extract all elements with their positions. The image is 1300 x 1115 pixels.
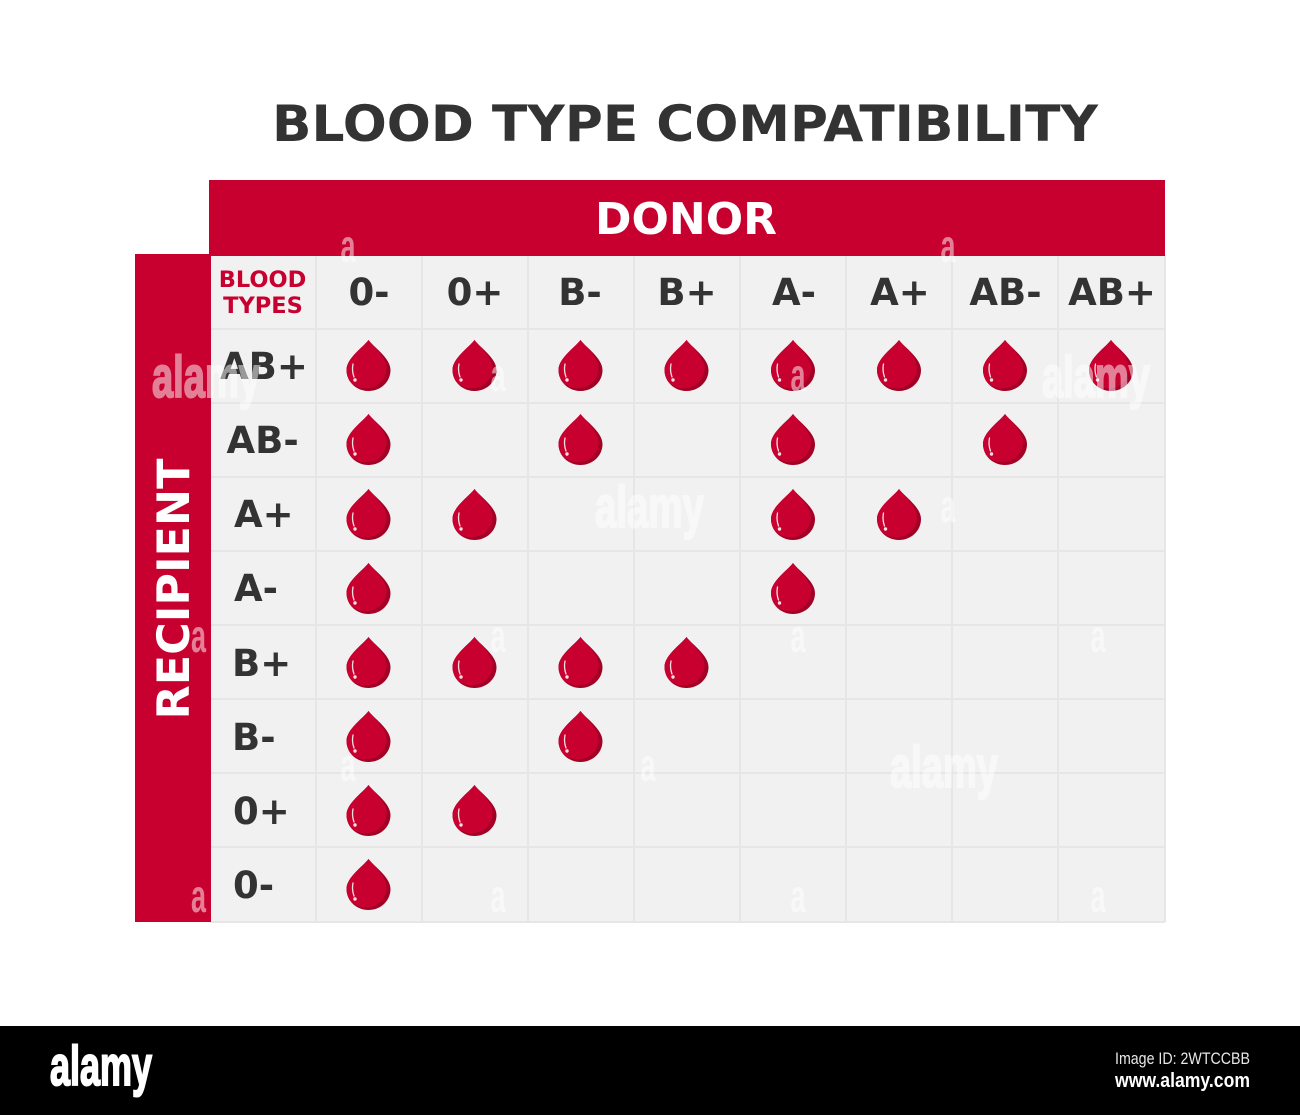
footer bar	[0, 1026, 1300, 1115]
watermarks: alamy	[1042, 345, 1150, 410]
watermarks: a	[490, 610, 506, 662]
watermarks: a	[940, 480, 956, 532]
recipient row headings: B+	[232, 642, 291, 685]
recipient row headings: AB+	[220, 345, 308, 388]
watermarks: a	[1090, 610, 1106, 662]
donor column headings: 0-	[348, 271, 390, 314]
watermarks: a	[191, 610, 206, 662]
donor column headings: A+	[870, 271, 930, 314]
donor header band: DONOR	[595, 194, 777, 245]
drops: B- recipient row	[346, 711, 602, 762]
donor column headings: B-	[558, 271, 602, 314]
donor header band	[209, 180, 1165, 256]
recipient row headings	[220, 345, 308, 907]
watermarks: alamy	[890, 735, 998, 800]
recipient row headings: 0+	[233, 790, 290, 833]
blood types corner label: TYPES	[223, 293, 303, 319]
donor column headings	[348, 271, 1156, 314]
drops: A- recipient row	[346, 563, 815, 614]
drops: AB+ recipient row	[346, 340, 1133, 391]
footer bar: alamy	[50, 1034, 152, 1097]
watermarks: a	[490, 870, 506, 922]
recipient row headings: A+	[234, 493, 294, 536]
drops: AB- recipient row	[346, 414, 1027, 465]
recipient row headings: B-	[232, 716, 276, 759]
footer bar: www.alamy.com	[1114, 1070, 1250, 1092]
blood types corner label	[219, 267, 306, 319]
footer bar: Image ID: 2WTCCBB	[1115, 1049, 1250, 1068]
donor column headings: 0+	[447, 271, 503, 314]
drops: B+ recipient row	[346, 637, 708, 688]
blood types corner label: BLOOD	[219, 267, 306, 293]
recipient side band	[135, 254, 211, 922]
panel: compatibility table background	[210, 255, 1165, 922]
drops: A+ recipient row	[346, 489, 921, 540]
watermarks: alamy	[595, 475, 704, 540]
drops: 0+ recipient row	[346, 785, 496, 836]
donor column headings: B+	[657, 271, 717, 314]
watermarks: a	[790, 870, 806, 922]
watermarks: a	[340, 220, 356, 272]
recipient side band: RECIPIENT	[149, 458, 200, 720]
watermarks: a	[490, 349, 506, 401]
donor column headings: AB+	[1068, 271, 1156, 314]
watermarks: a	[340, 739, 356, 791]
watermarks: alamy	[152, 345, 260, 410]
recipient row headings: 0-	[233, 864, 274, 907]
recipient row headings: A-	[234, 567, 278, 610]
drops: 0- recipient row	[346, 859, 390, 910]
donor column headings: AB-	[969, 271, 1042, 314]
donor column headings: A-	[772, 271, 816, 314]
watermarks: a	[940, 220, 956, 272]
watermarks: a	[790, 610, 806, 662]
watermarks: a	[191, 870, 206, 922]
title: BLOOD TYPE COMPATIBILITY	[272, 95, 1099, 153]
recipient row headings: AB-	[226, 419, 299, 462]
watermarks: a	[1090, 870, 1106, 922]
watermarks: a	[790, 349, 806, 401]
watermarks: a	[640, 739, 656, 791]
watermarks	[152, 220, 1150, 922]
